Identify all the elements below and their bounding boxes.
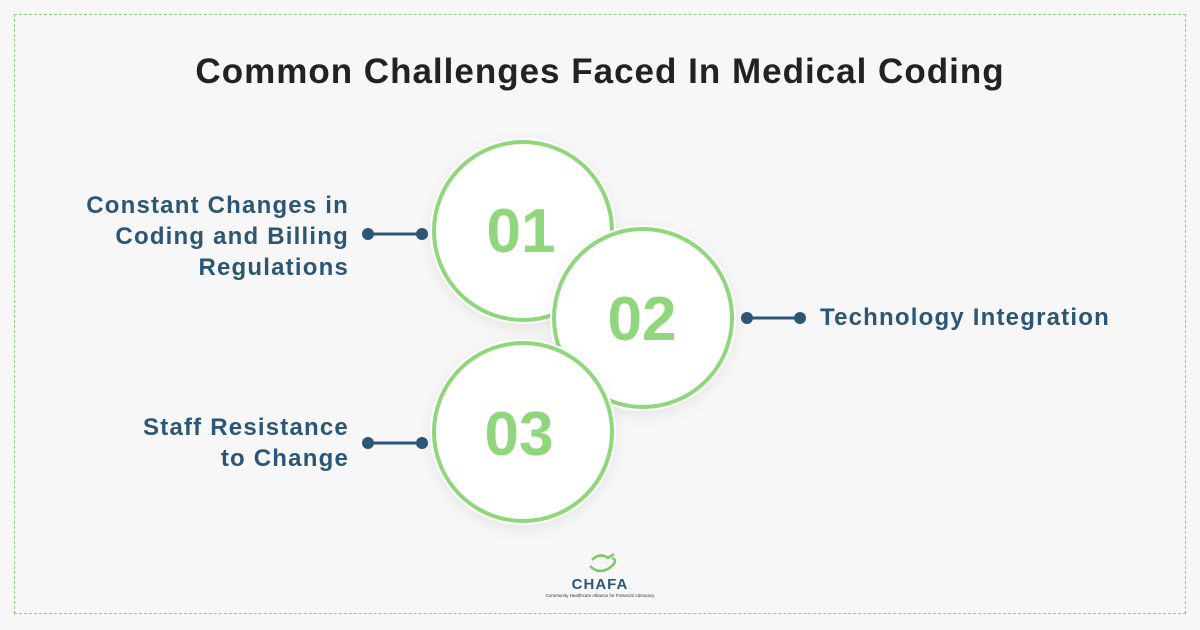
text: challenge 2: Technology Integration [820, 304, 1110, 331]
text: challenge 1: Coding and Billing [115, 223, 349, 250]
logo: CHAFA [572, 576, 628, 593]
circle 02: 02 [608, 285, 676, 354]
connector 2 [741, 312, 806, 324]
text: challenge 3 [143, 414, 349, 472]
title: Common Challenges Faced In Medical Coding [195, 52, 1005, 91]
text: challenge 1: Regulations [198, 254, 349, 281]
text: challenge 1: Constant Changes in [86, 192, 349, 219]
text: challenge 1 [86, 192, 349, 281]
text: challenge 3: Staff Resistance [143, 414, 349, 441]
circle 02 [550, 225, 736, 411]
connector 1 [362, 228, 428, 240]
text: challenge 3: to Change [221, 445, 349, 472]
logo: Community Healthcare Alliance for Financial Advocacy [546, 593, 655, 598]
circle 03 [430, 339, 616, 525]
connector 3 [362, 437, 428, 449]
circle 01 [430, 138, 616, 324]
circle 01: 01 [487, 197, 555, 266]
logo [546, 554, 655, 598]
circle 03: 03 [485, 400, 553, 469]
